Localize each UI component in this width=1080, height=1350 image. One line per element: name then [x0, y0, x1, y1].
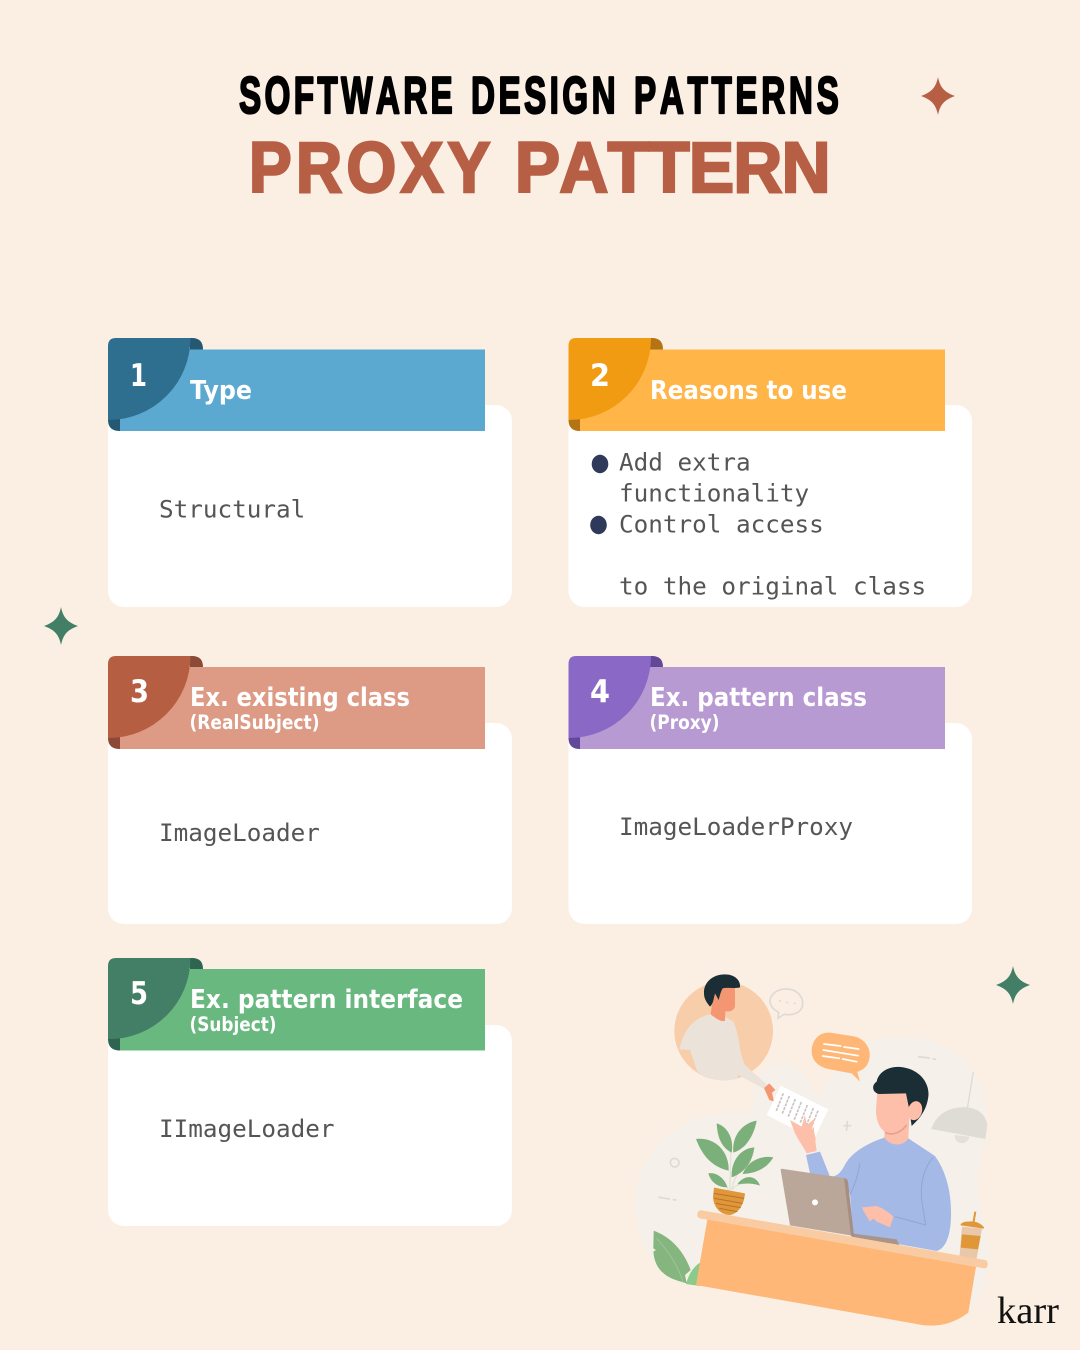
- panel: pattern class: [568, 656, 972, 924]
- title: software design patterns: [239, 67, 839, 125]
- laptop: [781, 1169, 899, 1245]
- person in circle: [674, 974, 775, 1102]
- panel: type: [108, 338, 512, 607]
- icon: green star left: [44, 607, 78, 645]
- panel: reasons to use: 2: [590, 358, 610, 394]
- panel: reasons to use: Add extra: [619, 448, 751, 476]
- title: software design patterns: DESIGN: [471, 67, 616, 125]
- panel: reasons to use: functionality: [619, 478, 809, 508]
- document: [767, 1086, 828, 1139]
- panel: existing class: [108, 656, 512, 924]
- panel: existing class: Ex. existing class: [190, 683, 410, 713]
- bottom leaves: [653, 1231, 700, 1286]
- grey speech bubble: [770, 989, 803, 1018]
- heading: proxy pattern: [249, 127, 830, 208]
- panel: reasons to use: Control access: [619, 510, 824, 538]
- panel: pattern interface: (Subject): [190, 1013, 276, 1036]
- coffee cup: [959, 1212, 984, 1258]
- panel: reasons to use: [568, 338, 972, 607]
- panel: existing class: (RealSubject): [190, 711, 320, 734]
- panel: pattern interface: Ex. pattern interface: [190, 985, 463, 1015]
- panel: reasons to use: to the original class: [619, 572, 926, 600]
- panel: pattern class: Ex. pattern class: [650, 683, 867, 713]
- man: [790, 1067, 951, 1251]
- illustration: office worker at desk: [636, 974, 988, 1326]
- panel: type: Type: [190, 376, 252, 406]
- logo: karr: karr: [997, 1290, 1059, 1332]
- panel: pattern class: ImageLoaderProxy: [619, 812, 853, 841]
- panel: type: Structural: [159, 494, 305, 524]
- panel: pattern interface: [108, 958, 512, 1226]
- panel: pattern class: 4: [590, 674, 610, 710]
- panel: reasons to use: Reasons to use: [650, 376, 847, 406]
- desk: [696, 1210, 988, 1326]
- background blob: [636, 1037, 988, 1313]
- icon: green star right: [996, 966, 1030, 1004]
- panel: pattern interface: 5: [130, 976, 148, 1012]
- panel: existing class: 3: [130, 674, 149, 710]
- title: software design patterns: SOFTWARE: [239, 67, 453, 125]
- panel: pattern class: (Proxy): [650, 711, 720, 734]
- lamp: [931, 1072, 987, 1143]
- plant: [696, 1121, 773, 1215]
- orange speech bubble: [812, 1033, 870, 1082]
- heading: proxy pattern: PATTERN: [515, 127, 830, 207]
- heading: proxy pattern: PROXY: [249, 129, 490, 208]
- title: software design patterns: PATTERNS: [634, 67, 839, 125]
- panel: type: 1: [130, 358, 147, 394]
- icon: brown star: [921, 77, 955, 115]
- panel: existing class: ImageLoader: [159, 818, 320, 847]
- small decor marks: [659, 1057, 935, 1200]
- panel: pattern interface: IImageLoader: [159, 1114, 335, 1143]
